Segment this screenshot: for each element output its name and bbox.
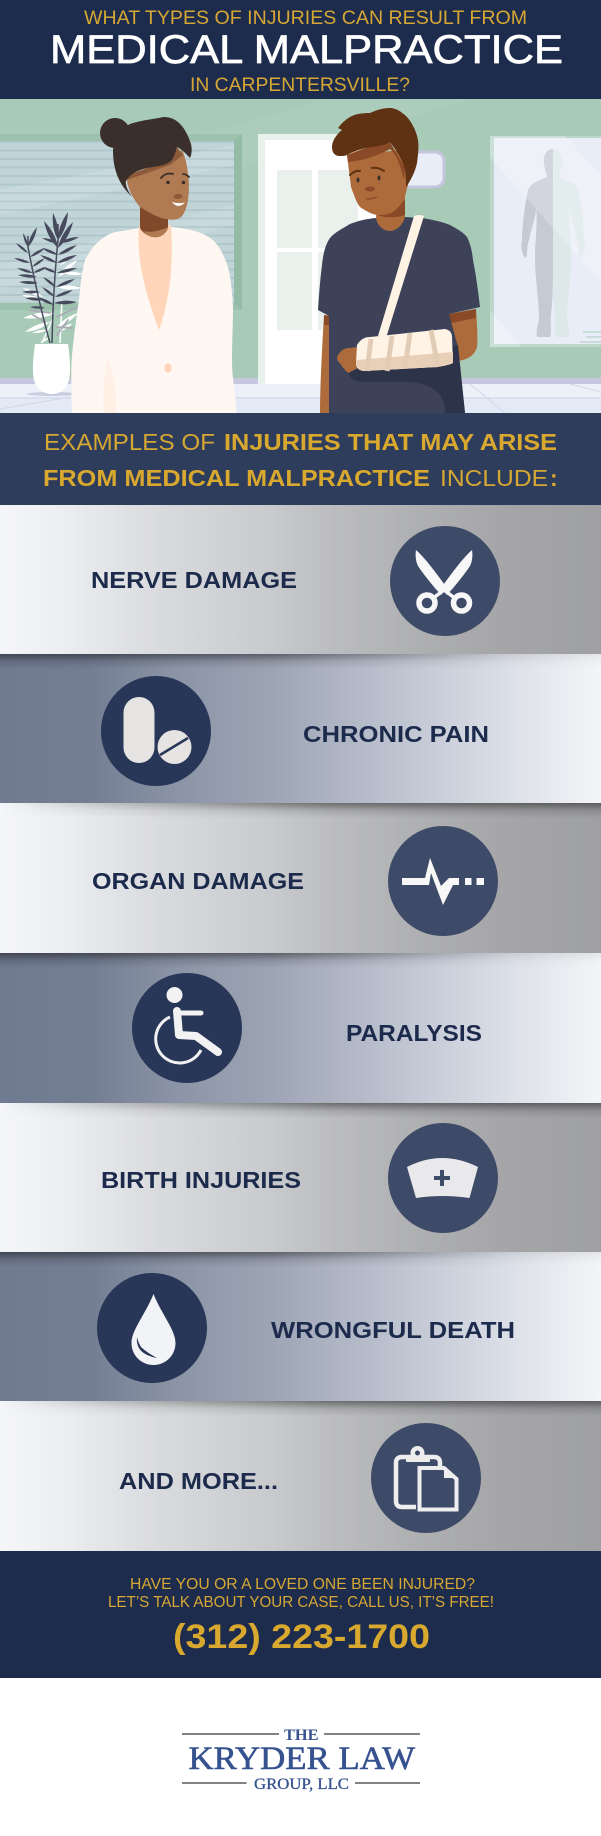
face bbox=[127, 150, 189, 220]
white fronds bbox=[22, 258, 83, 344]
icon: scissors bbox=[390, 526, 500, 636]
poster glare bbox=[490, 136, 566, 228]
right arm bbox=[449, 309, 477, 362]
row: paralysis: PARALYSIS bbox=[346, 1020, 482, 1046]
row: chronic pain: CHRONIC PAIN bbox=[303, 721, 489, 747]
neck bbox=[376, 196, 405, 231]
logo: THE bbox=[284, 1727, 318, 1744]
main title: MEDICAL MALPRACTICE bbox=[50, 28, 563, 72]
logo: KRYDER LAW bbox=[188, 1741, 416, 1777]
wall bbox=[0, 99, 601, 379]
hand bbox=[337, 347, 358, 373]
facial features bbox=[161, 174, 189, 178]
body silhouette bbox=[521, 149, 553, 337]
shirt fold bbox=[347, 345, 465, 413]
row: wrongful death: WRONGFUL DEATH bbox=[271, 1317, 515, 1343]
logo: GROUP, LLC bbox=[254, 1776, 349, 1793]
hair shadow bbox=[347, 142, 405, 180]
header panel bbox=[0, 0, 601, 100]
subheading band: INJURIES THAT MAY ARISE bbox=[224, 429, 557, 455]
grey fronds bbox=[30, 307, 77, 335]
floor bbox=[0, 384, 601, 414]
row: organ damage: ORGAN DAMAGE bbox=[92, 868, 304, 894]
wall sign bbox=[407, 150, 446, 188]
phone number: (312) 223-1700 bbox=[173, 1618, 430, 1656]
coat button bbox=[164, 363, 172, 373]
illustration: clinic scene bbox=[0, 99, 601, 414]
v-neck bbox=[138, 225, 172, 330]
subheading band: INCLUDE bbox=[440, 465, 548, 491]
anatomy poster bbox=[490, 136, 601, 347]
hair bbox=[332, 108, 418, 187]
neck bbox=[140, 205, 168, 237]
subheading band bbox=[0, 413, 601, 505]
coat slit bbox=[103, 360, 116, 413]
row: paralysis bbox=[0, 953, 601, 1103]
hair bbox=[113, 117, 192, 197]
facial features bbox=[350, 168, 384, 175]
header line: location: IN CARPENTERSVILLE? bbox=[190, 75, 410, 96]
subheading band: FROM MEDICAL MALPRACTICE bbox=[43, 465, 430, 491]
pot bbox=[27, 392, 72, 396]
row: birth injuries: BIRTH INJURIES bbox=[101, 1167, 301, 1193]
row: birth injuries bbox=[0, 1103, 601, 1252]
injured man bbox=[318, 108, 480, 413]
footer call to action: HAVE YOU OR A LOVED ONE BEEN INJURED? bbox=[130, 1576, 475, 1593]
header line: what types of injuries: WHAT TYPES OF INJURIES CAN RESULT FROM bbox=[84, 8, 527, 29]
plant bbox=[14, 211, 83, 396]
icon: nurse cap bbox=[388, 1123, 498, 1233]
footer call to action bbox=[0, 1551, 601, 1678]
subheading band: : bbox=[550, 465, 558, 491]
woman doctor bbox=[71, 117, 237, 413]
footer call to action: LET’S TALK ABOUT YOUR CASE, CALL US, IT’S FREE! bbox=[108, 1594, 494, 1611]
face bbox=[347, 150, 410, 215]
hair shade bbox=[127, 147, 183, 180]
baseboard bbox=[0, 378, 601, 384]
icon: heartbeat bbox=[388, 826, 498, 936]
icon: pills bbox=[101, 676, 211, 786]
logo bbox=[182, 1727, 420, 1793]
subheading band: EXAMPLES OF bbox=[44, 429, 215, 455]
t-shirt bbox=[318, 217, 480, 413]
row: chronic pain bbox=[0, 654, 601, 803]
row: wrongful death bbox=[0, 1252, 601, 1401]
row: and more bbox=[0, 1401, 601, 1551]
row text: NERVE DAMAGE bbox=[91, 567, 297, 593]
row: and more: AND MORE... bbox=[119, 1468, 278, 1494]
icon: wheelchair bbox=[132, 973, 242, 1083]
sling strap bbox=[378, 215, 424, 338]
arm cast bbox=[356, 329, 453, 371]
door bbox=[258, 134, 385, 384]
coat bbox=[71, 227, 237, 413]
icon: clipboard and document bbox=[371, 1423, 481, 1533]
row: organ damage bbox=[0, 803, 601, 953]
left arm bbox=[320, 316, 329, 413]
icon: blood drop bbox=[97, 1273, 207, 1383]
row: nerve damage bbox=[0, 505, 601, 654]
window with blinds bbox=[0, 134, 242, 310]
dark fronds bbox=[28, 224, 58, 343]
